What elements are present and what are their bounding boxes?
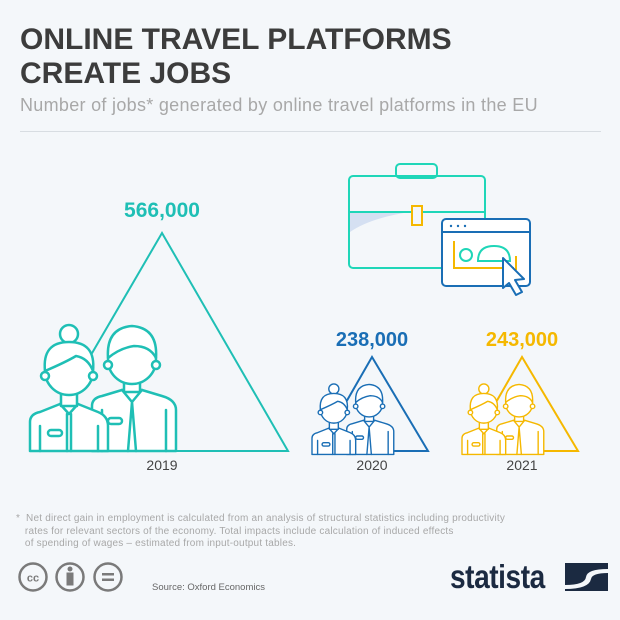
2019 group bbox=[30, 199, 288, 473]
footnote: * Net direct gain in employment is calculated from an analysis of structural statistics including productivity bbox=[16, 513, 505, 524]
2019 group: 566,000 bbox=[124, 199, 200, 222]
source: Source: Oxford Economics bbox=[152, 582, 265, 593]
logo: statista: statista bbox=[450, 558, 545, 595]
icon: briefcase and booking window bbox=[349, 164, 530, 295]
2019 group: 2019 bbox=[146, 457, 178, 473]
footnote bbox=[16, 513, 505, 549]
title bbox=[20, 23, 452, 90]
icon: license badges: cc bbox=[27, 572, 39, 584]
title: CREATE JOBS bbox=[20, 57, 231, 90]
subtitle: Number of jobs* generated by online travel platforms in the EU bbox=[20, 95, 538, 115]
2020 group: 2020 bbox=[356, 457, 388, 473]
title: ONLINE TRAVEL PLATFORMS bbox=[20, 23, 452, 56]
icon: license badges bbox=[18, 562, 123, 592]
footnote: rates for relevant sectors of the economy. Total impacts include calculation of induced effects bbox=[25, 526, 454, 536]
2020 group bbox=[312, 329, 428, 473]
2020 group: 238,000 bbox=[336, 329, 408, 351]
2021 group bbox=[462, 329, 578, 473]
2021 group: 243,000 bbox=[486, 329, 558, 351]
footnote: of spending of wages – estimated from input-output tables. bbox=[25, 538, 296, 549]
logo: statista bbox=[450, 558, 608, 595]
2021 group: 2021 bbox=[506, 457, 538, 473]
